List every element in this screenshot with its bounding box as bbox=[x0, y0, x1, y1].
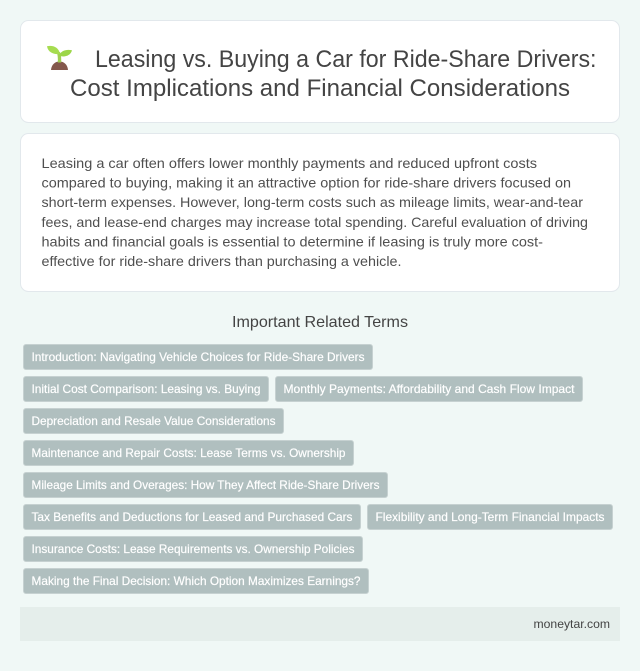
text block: summary paragraph: short-term expenses. However, long-term costs such as mileage limits, wear-and-tear bbox=[42, 194, 583, 210]
tag: initial cost: Initial Cost Comparison: Leasing vs. Buying bbox=[32, 382, 260, 396]
tag: monthly payments bbox=[276, 376, 582, 402]
tag: maintenance bbox=[24, 440, 354, 466]
tag: mileage limits: Mileage Limits and Overages: How They Affect Ride-Share Drivers bbox=[32, 478, 380, 492]
tag: initial cost bbox=[24, 376, 268, 402]
heading: important related terms: Important Related Terms bbox=[232, 314, 408, 331]
tag: introduction bbox=[24, 344, 372, 370]
tag: depreciation: Depreciation and Resale Value Considerations bbox=[32, 414, 276, 428]
text block: summary paragraph: fees, and lease-end charges may increase total spending. Careful evaluation of driving bbox=[42, 214, 588, 230]
tag: mileage limits bbox=[24, 472, 388, 498]
panel: title card bbox=[20, 20, 620, 122]
tag: tax benefits: Tax Benefits and Deductions for Leased and Purchased Cars bbox=[32, 510, 352, 524]
panel: related term tags bbox=[24, 344, 612, 594]
tag: insurance bbox=[24, 536, 362, 562]
footer: source credit: moneytar.com bbox=[534, 617, 610, 631]
title bbox=[70, 46, 596, 102]
text block: summary paragraph bbox=[42, 155, 588, 269]
title: Leasing vs. Buying a Car for Ride-Share Drivers: bbox=[95, 46, 596, 73]
tag: monthly payments: Monthly Payments: Affordability and Cash Flow Impact bbox=[284, 382, 575, 396]
panel: summary card bbox=[20, 134, 620, 292]
tag: tax benefits bbox=[24, 504, 360, 530]
icon: sprout bbox=[47, 46, 72, 70]
tag: depreciation bbox=[24, 408, 284, 434]
text block: summary paragraph: Leasing a car often offers lower monthly payments and reduced upfront costs bbox=[42, 155, 537, 171]
tag: flexibility bbox=[368, 504, 612, 530]
tag: final decision: Making the Final Decision: Which Option Maximizes Earnings? bbox=[32, 574, 361, 588]
text block: summary paragraph: habits and financial goals is essential to determine if leasing is truly more cost- bbox=[42, 233, 543, 249]
tag: maintenance: Maintenance and Repair Costs: Lease Terms vs. Ownership bbox=[32, 446, 346, 460]
text block: summary paragraph: compared to buying, making it an attractive option for ride-share drivers focused on bbox=[42, 175, 571, 191]
text block: summary paragraph: effective for ride-share drivers than purchasing a vehicle. bbox=[42, 253, 402, 269]
title: Cost Implications and Financial Considerations bbox=[70, 75, 570, 102]
tag: final decision bbox=[24, 568, 368, 594]
tag: insurance: Insurance Costs: Lease Requirements vs. Ownership Policies bbox=[32, 542, 354, 556]
tag: flexibility: Flexibility and Long-Term Financial Impacts bbox=[376, 510, 604, 524]
tag: introduction: Introduction: Navigating Vehicle Choices for Ride-Share Drivers bbox=[32, 350, 364, 364]
footer bar bbox=[20, 607, 620, 641]
